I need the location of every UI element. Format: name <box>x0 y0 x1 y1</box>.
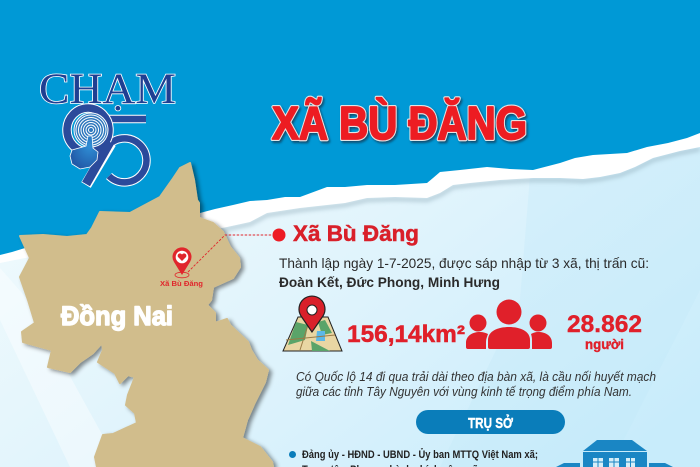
main title: XÃ BÙ ĐĂNG <box>272 97 527 149</box>
map pin <box>172 247 192 278</box>
icon: building <box>556 440 673 467</box>
section heading: Xã Bù Đăng <box>293 221 419 246</box>
logo: Chạm 95 <box>39 66 176 185</box>
description text: Có Quốc lộ 14 đi qua trải dài theo địa bàn xã, là cầu nối huyết mạch <box>296 369 656 384</box>
office list <box>289 448 538 467</box>
intro text: Thành lập ngày 1-7-2025, được sáp nhập từ 3 xã, thị trấn cũ: <box>279 255 649 271</box>
map of Đồng Nai <box>20 163 273 467</box>
stat: population: 28.862 <box>567 311 642 338</box>
background: light paper area <box>0 145 700 467</box>
intro text: Đoàn Kết, Đức Phong, Minh Hưng <box>279 274 500 290</box>
torn white paper edge <box>0 133 700 263</box>
stat: area: 156,14km² <box>347 321 465 348</box>
logo number 5 <box>97 119 146 182</box>
main title: XÃ BÙ ĐĂNG <box>272 97 527 149</box>
map shape <box>20 163 273 467</box>
logo fingerprint <box>74 113 108 147</box>
description text: giữa các tỉnh Tây Nguyên với vùng kinh tế trọng điểm phía Nam. <box>296 384 632 399</box>
description text <box>296 369 656 399</box>
pin label: Xã Bù Đăng <box>160 281 203 288</box>
intro text <box>279 255 649 290</box>
map label: Đồng Nai <box>61 301 173 331</box>
stat: population <box>567 311 642 352</box>
logo wordmark: CHẠM <box>39 66 176 113</box>
office list: Đảng ủy - HĐND - UBND - Ủy ban MTTQ Việt Nam xã; <box>302 448 538 461</box>
dashed leader line <box>188 235 272 272</box>
button: Trụ sở: TRỤ SỞ <box>468 414 513 432</box>
logo hand <box>70 136 98 169</box>
logo number 9 <box>67 108 111 185</box>
icon: people <box>466 300 552 349</box>
icon: map with pin <box>283 296 342 351</box>
stat: population: người <box>585 336 624 352</box>
button: Trụ sở <box>416 410 565 434</box>
